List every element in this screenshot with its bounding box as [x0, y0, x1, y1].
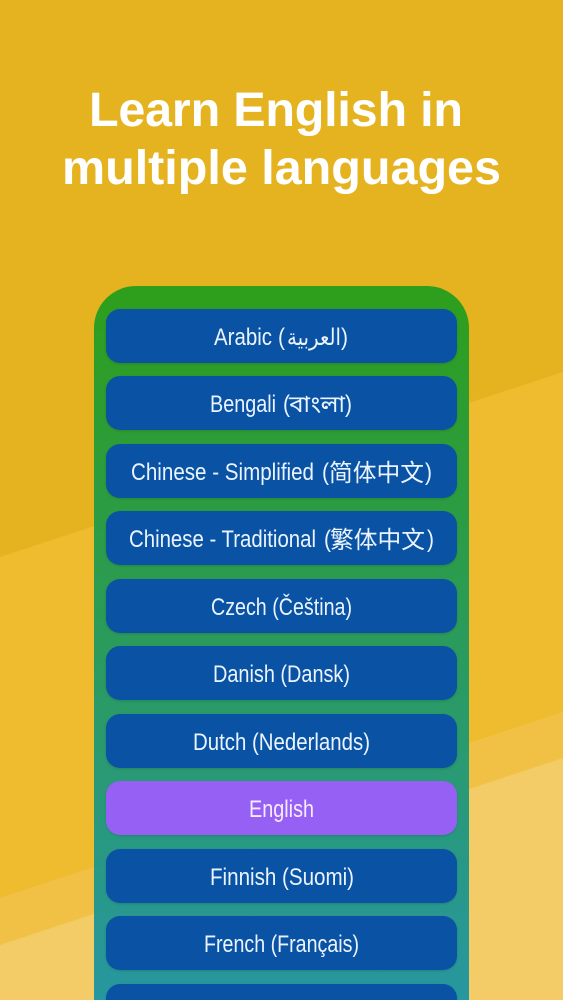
- button: Bengali: [106, 376, 457, 430]
- button: English selected: English: [249, 796, 314, 823]
- button: Chinese Simplified: ): [425, 459, 432, 486]
- button: Chinese Simplified: (: [322, 459, 329, 486]
- button: Danish: Danish (Dansk): [213, 661, 350, 688]
- title: Learn English in: [89, 83, 463, 137]
- button: Czech: Czech (Čeština): [211, 593, 352, 621]
- button: Bengali: (: [283, 391, 290, 418]
- button: Arabic: Arabic: [214, 324, 272, 351]
- button: Chinese Traditional: [106, 511, 457, 565]
- button: Bengali: বাংলা: [288, 391, 346, 417]
- button: Arabic: العربية: [287, 325, 341, 351]
- button: French: French (Français): [204, 931, 359, 958]
- button: Chinese Simplified: 简体中文: [329, 453, 424, 488]
- button: Dutch: Dutch (Nederlands): [193, 729, 370, 756]
- button: Dutch: [106, 714, 457, 768]
- button: Arabic: ): [341, 324, 348, 351]
- button: Czech: [106, 579, 457, 633]
- button: partially visible next item: [106, 984, 457, 1000]
- button: Chinese Traditional: ): [427, 526, 434, 553]
- button: Chinese Traditional: Chinese - Traditional: [129, 526, 316, 553]
- button: Chinese Simplified: Chinese - Simplified: [131, 459, 314, 486]
- button: Chinese Traditional: (: [324, 526, 331, 553]
- title: [62, 83, 501, 195]
- button: French: [106, 916, 457, 970]
- button: Bengali: ): [345, 391, 352, 418]
- button: Danish: [106, 646, 457, 700]
- title: multiple languages: [62, 141, 501, 195]
- button: Chinese Traditional: 繁体中文: [330, 520, 425, 555]
- button: English selected: [106, 781, 457, 835]
- panel: language list: [94, 286, 469, 1000]
- button: Finnish: [106, 849, 457, 903]
- button: Arabic: [106, 309, 457, 363]
- button: Arabic: (: [278, 324, 285, 351]
- button: Finnish: Finnish (Suomi): [210, 864, 354, 891]
- button: Chinese Simplified: [106, 444, 457, 498]
- button: Bengali: Bengali: [210, 391, 276, 418]
